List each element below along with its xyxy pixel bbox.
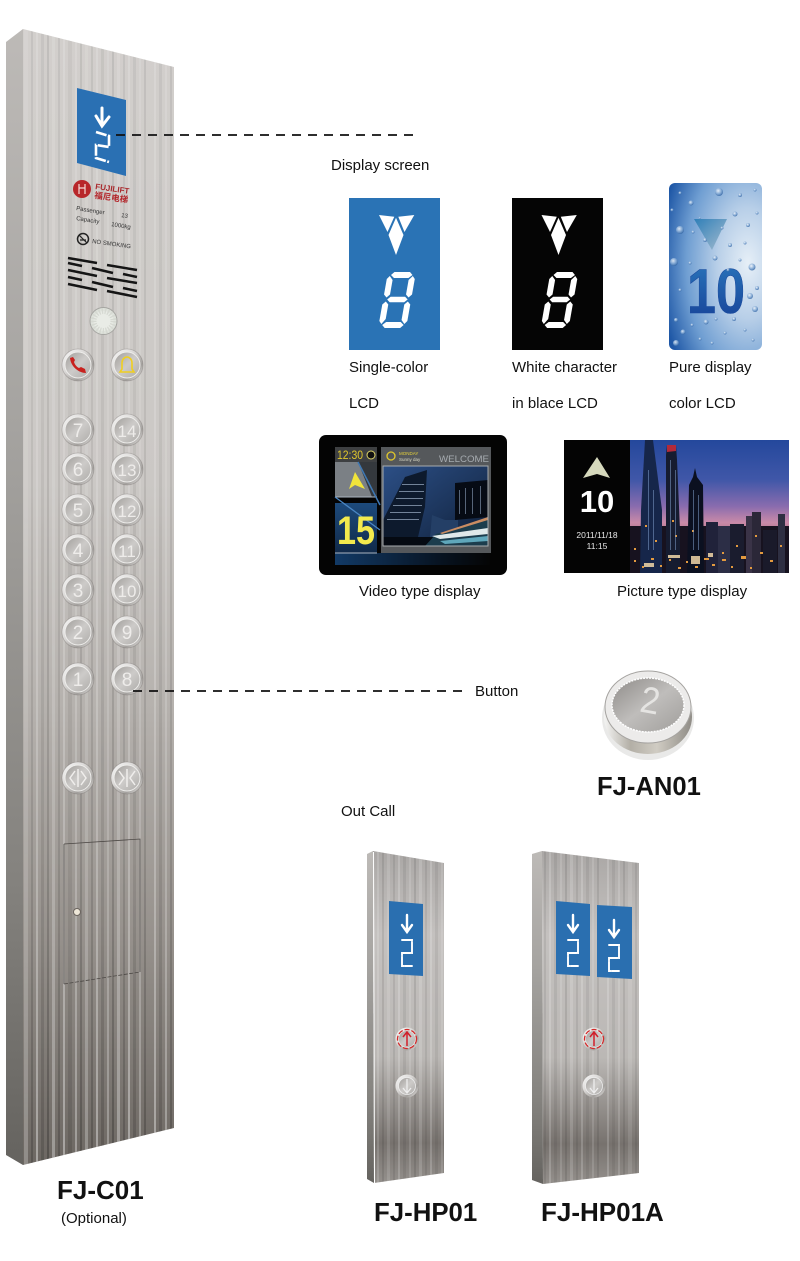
panel: FJ-HP01 hall call [367,851,444,1183]
label: video type display: Video type display [359,583,481,600]
button 6 [62,453,94,485]
phone button [62,349,94,381]
label: pure display color LCD: Pure display [669,359,752,376]
microphone [90,308,117,334]
button 11: 11 [118,542,136,561]
label: button: Button [475,683,518,700]
up arrow [583,457,610,478]
button 5 [62,494,94,526]
skyline photograph [630,440,789,573]
display: video type: 15 [337,509,375,553]
display screen [77,88,126,176]
button 7 [62,414,94,446]
display: video type: WELCOME [439,454,489,465]
label: pure display color LCD: color LCD [669,395,736,412]
door close button [111,762,143,794]
model name: FJ-AN01: FJ-AN01 [597,773,701,801]
button 3: 3 [73,581,83,602]
display: video type: Sunny day [399,457,421,462]
label: single-color LCD: Single-color [349,359,428,376]
button 12 [111,494,143,526]
up call button [582,1028,606,1050]
button 1 [62,663,94,695]
button product FJ-AN01: 2 [637,678,663,723]
button 14: 14 [118,422,136,441]
side face [532,851,543,1184]
button 14 [111,414,143,446]
blue display right [597,905,632,979]
button product FJ-AN01 [602,671,694,760]
brand logo [73,180,130,205]
button 8 [111,663,143,695]
display: video type: MONDAY [399,451,418,456]
label: picture type display: Picture type display [617,583,748,600]
button 5: 5 [73,501,83,522]
heading: display screen: Display screen [331,157,429,174]
door open button [62,762,94,794]
button 4: 4 [73,541,84,562]
display: video type: 12:30 [337,448,363,462]
down call button [582,1074,606,1098]
button 9: 9 [122,623,132,644]
button 13: 13 [118,461,136,480]
no smoking notice: NO SMOKING [92,239,132,250]
front face [542,851,639,1184]
button 10 [111,574,143,606]
video left column [335,447,377,462]
brand logo: 福尼电梯 [94,190,129,205]
capacity information: 13 [121,213,129,220]
label: white character LCD: White character [512,359,617,376]
video city image [383,466,488,546]
capacity information [76,206,131,231]
label: single-color LCD: LCD [349,395,379,412]
button 7: 7 [73,421,83,442]
model name: FJ-C01: FJ-C01 [57,1175,144,1205]
button 13 [111,453,143,485]
button 6: 6 [73,460,83,481]
alarm bell button [111,349,143,381]
button 2: 2 [73,623,83,644]
button 10: 10 [118,582,136,601]
panel side face [6,29,23,1165]
no smoking notice [78,234,132,250]
button 8: 8 [122,670,132,691]
video right column [381,447,491,553]
display: video type [319,435,507,575]
model name: FJ-HP01A: FJ-HP01A [541,1197,664,1227]
display: pure display color LCD: 10 [687,257,745,327]
blue display [389,901,423,976]
capacity information: Passenger [76,206,105,216]
display: white character in black LCD [512,198,603,350]
label: white character LCD: in blace LCD [512,395,598,412]
display: pure display color LCD [669,183,762,350]
button 1: 1 [73,670,83,691]
display: picture type [564,440,789,573]
button 3 [62,574,94,606]
blue display left [556,901,590,976]
button 2 [62,616,94,648]
capacity information: Capacity [76,216,100,226]
button 12: 12 [118,502,136,521]
date and time: 2011/11/18 [576,530,618,540]
button 4 [62,534,94,566]
panel: FJ-HP01A hall call [532,851,639,1184]
leader line: button [133,690,462,692]
side face [367,851,374,1183]
model name: FJ-HP01: FJ-HP01 [374,1199,477,1227]
heading: out call: Out Call [341,803,395,820]
floor number: 10 [580,484,614,519]
display: picture type: 11:15 [587,541,608,551]
floor buttons [62,414,143,695]
speaker slots [68,258,137,297]
leader line: display screen [116,134,420,136]
down call button [396,1074,418,1098]
button 9 [111,616,143,648]
panel: FJ-C01 car operating panel [6,29,174,1165]
button 11 [111,534,143,566]
note: optional: (Optional) [61,1210,127,1227]
panel front face [23,29,174,1165]
up call button [396,1028,418,1050]
capacity information: 1000kg [111,222,131,231]
service cabinet door [64,839,140,984]
front face [373,851,444,1183]
display: single-color LCD [349,198,440,350]
brand logo: FUJILIFT [95,182,130,196]
